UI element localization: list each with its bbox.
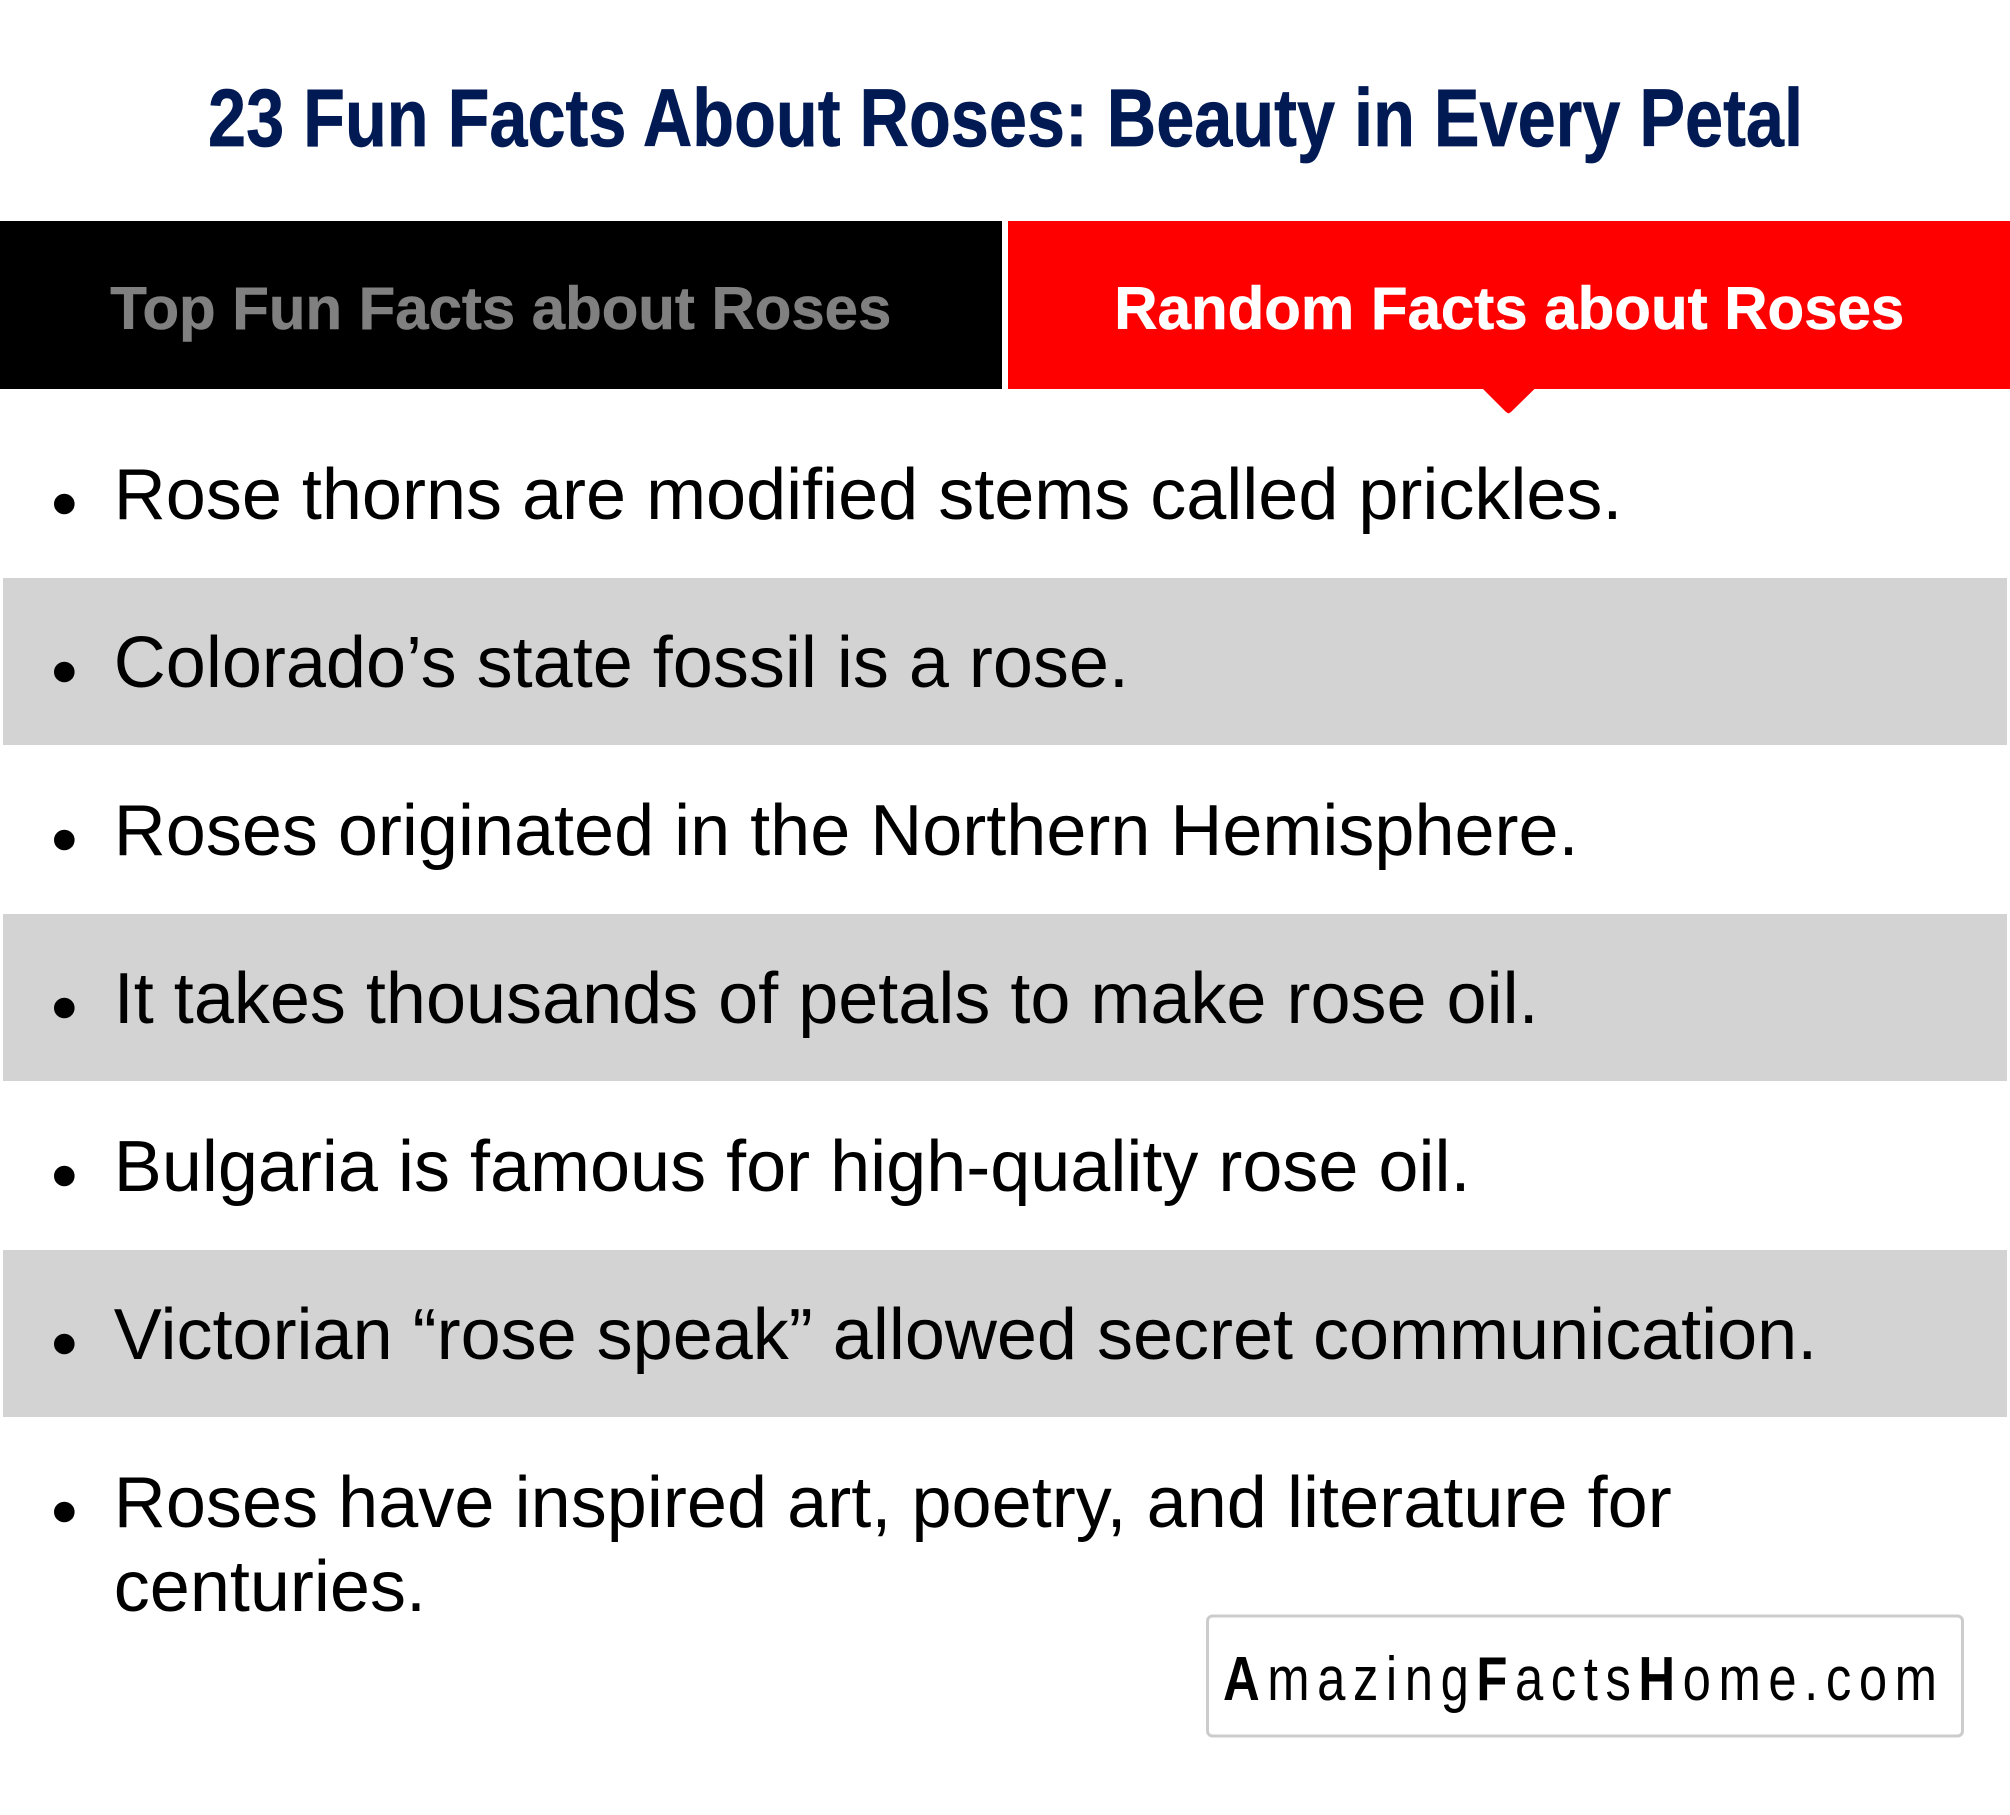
fact 6 <box>3 1250 2007 1417</box>
panel: facts list <box>3 455 2007 1627</box>
panel: tab bar <box>0 221 2010 414</box>
fact 7 <box>54 1463 1672 1627</box>
fact 7: Roses have inspired art, poetry, and literature for <box>114 1463 1672 1543</box>
fact 2 <box>3 578 2007 745</box>
watermark badge: AmazingFactsHome.com <box>1223 1645 1945 1714</box>
watermark badge <box>1208 1616 1962 1736</box>
fact 4 <box>3 914 2007 1081</box>
fact 3: Roses originated in the Northern Hemisphere. <box>114 791 1579 871</box>
fact 7: centuries. <box>114 1547 426 1627</box>
tab: random facts (active): Random Facts about Roses <box>1114 275 1904 342</box>
tab: top fun facts (inactive) <box>0 221 1002 389</box>
fact 5: Bulgaria is famous for high-quality rose oil. <box>114 1127 1470 1207</box>
tab: random facts (active) <box>1008 221 2010 414</box>
fact 6: Victorian “rose speak” allowed secret communication. <box>114 1295 1817 1375</box>
fact 1: Rose thorns are modified stems called prickles. <box>114 455 1622 535</box>
tab: top fun facts (inactive): Top Fun Facts about Roses <box>110 275 891 342</box>
fact 4: It takes thousands of petals to make rose oil. <box>114 959 1539 1039</box>
fact 2: Colorado’s state fossil is a rose. <box>114 623 1129 703</box>
